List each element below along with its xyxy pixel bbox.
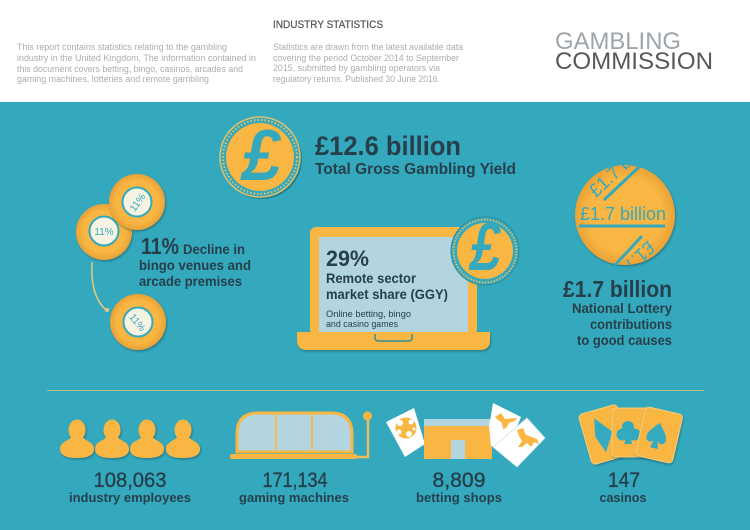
data source text block: Statistics are drawn from the latest available data	[273, 42, 463, 52]
icon: playing cards	[578, 404, 683, 465]
remote sector text: and casino games	[326, 319, 398, 329]
icon: laptop	[297, 227, 490, 350]
intro text block: This report contains statistics relating to the gambling	[17, 42, 227, 52]
logo: Gambling Commission: GAMBLING	[555, 28, 681, 55]
remote sector text	[326, 246, 448, 329]
bingo statistic text: 11%	[141, 233, 179, 259]
gaming machines statistic: gaming machines	[239, 490, 349, 505]
logo: Gambling Commission: COMMISSION	[555, 48, 713, 75]
betting slip: horse 1	[489, 403, 521, 450]
national lottery statistic text	[563, 276, 672, 348]
bingo ball 3	[110, 294, 166, 350]
icon: lottery ball: £1.7 billion	[580, 203, 666, 224]
national lottery statistic text: £1.7 billion	[563, 276, 672, 302]
total gross gambling yield	[315, 131, 516, 178]
bingo balls	[76, 174, 166, 350]
remote sector text: Online betting, bingo	[326, 309, 411, 319]
total gross gambling yield: £12.6 billion	[315, 131, 461, 161]
intro text block: industry in the United Kingdom, The information contained in	[17, 53, 256, 63]
bingo ball 2: 11%	[128, 192, 148, 214]
card: spade	[635, 406, 683, 464]
betting shops statistic: 8,809	[432, 469, 486, 492]
intro text block	[17, 42, 256, 84]
card: left	[578, 404, 631, 465]
icon: four people	[60, 420, 200, 458]
bingo statistic text: bingo venues and	[139, 257, 251, 273]
bingo ball 1	[76, 204, 132, 260]
casinos statistic	[600, 469, 646, 505]
data source text block	[273, 42, 463, 84]
betting shops statistic: betting shops	[416, 490, 502, 505]
bingo ball 2	[109, 174, 165, 230]
employees statistic: 108,063	[94, 469, 166, 492]
card: club	[612, 408, 652, 457]
intro text block: gaming machines, lotteries and remote gambling	[17, 74, 209, 84]
bingo ball 1: 11%	[94, 227, 114, 238]
betting slip: football	[386, 408, 425, 457]
icon: large pound coin: £	[240, 116, 282, 196]
arrow head	[105, 308, 109, 312]
national lottery statistic text: National Lottery	[572, 301, 672, 316]
heading: industry statistics: INDUSTRY STATISTICS	[273, 19, 383, 31]
remote sector text: market share (GGY)	[326, 286, 448, 302]
betting slip: horse 2	[493, 418, 545, 467]
gaming machines statistic	[239, 469, 349, 505]
gaming machines statistic: 171,134	[262, 469, 328, 492]
icon: betting shop and slips	[386, 403, 545, 467]
icon: lottery ball: £1.7 billion	[582, 237, 660, 311]
bingo ball 3: 11%	[126, 312, 147, 334]
national lottery statistic text: contributions	[590, 317, 672, 332]
logo: Gambling Commission	[555, 28, 713, 75]
employees statistic: industry employees	[69, 490, 191, 505]
icon: lottery ball	[575, 165, 677, 268]
casinos statistic: casinos	[600, 490, 646, 505]
header background	[0, 0, 750, 102]
bingo statistic text: Decline in	[183, 241, 245, 257]
bingo statistic text	[139, 233, 251, 289]
data source text block: 2015, submitted by gambling operators via	[273, 63, 440, 73]
icon: lottery ball: £1.7 billion	[584, 127, 662, 201]
shop	[424, 419, 492, 459]
national lottery statistic text: to good causes	[577, 333, 672, 348]
data source text block: regulatory returns. Published 30 June 2016.	[273, 74, 440, 84]
curved arrow	[92, 262, 106, 310]
total gross gambling yield: Total Gross Gambling Yield	[315, 161, 516, 178]
icon: laptop pound coin	[451, 209, 519, 285]
icon: large pound coin	[220, 116, 302, 199]
casinos statistic: 147	[608, 469, 640, 492]
icon: gaming machine	[230, 412, 372, 459]
remote sector text: Remote sector	[326, 270, 417, 286]
intro text block: this document covers betting, bingo, casinos, arcades and	[17, 64, 243, 74]
betting shops statistic	[416, 469, 502, 505]
remote sector text: 29%	[326, 246, 369, 271]
employees statistic	[69, 469, 191, 505]
icon: laptop pound coin: £	[468, 209, 501, 285]
data source text block: covering the period October 2014 to September	[273, 53, 459, 63]
bingo statistic text: arcade premises	[139, 273, 242, 289]
